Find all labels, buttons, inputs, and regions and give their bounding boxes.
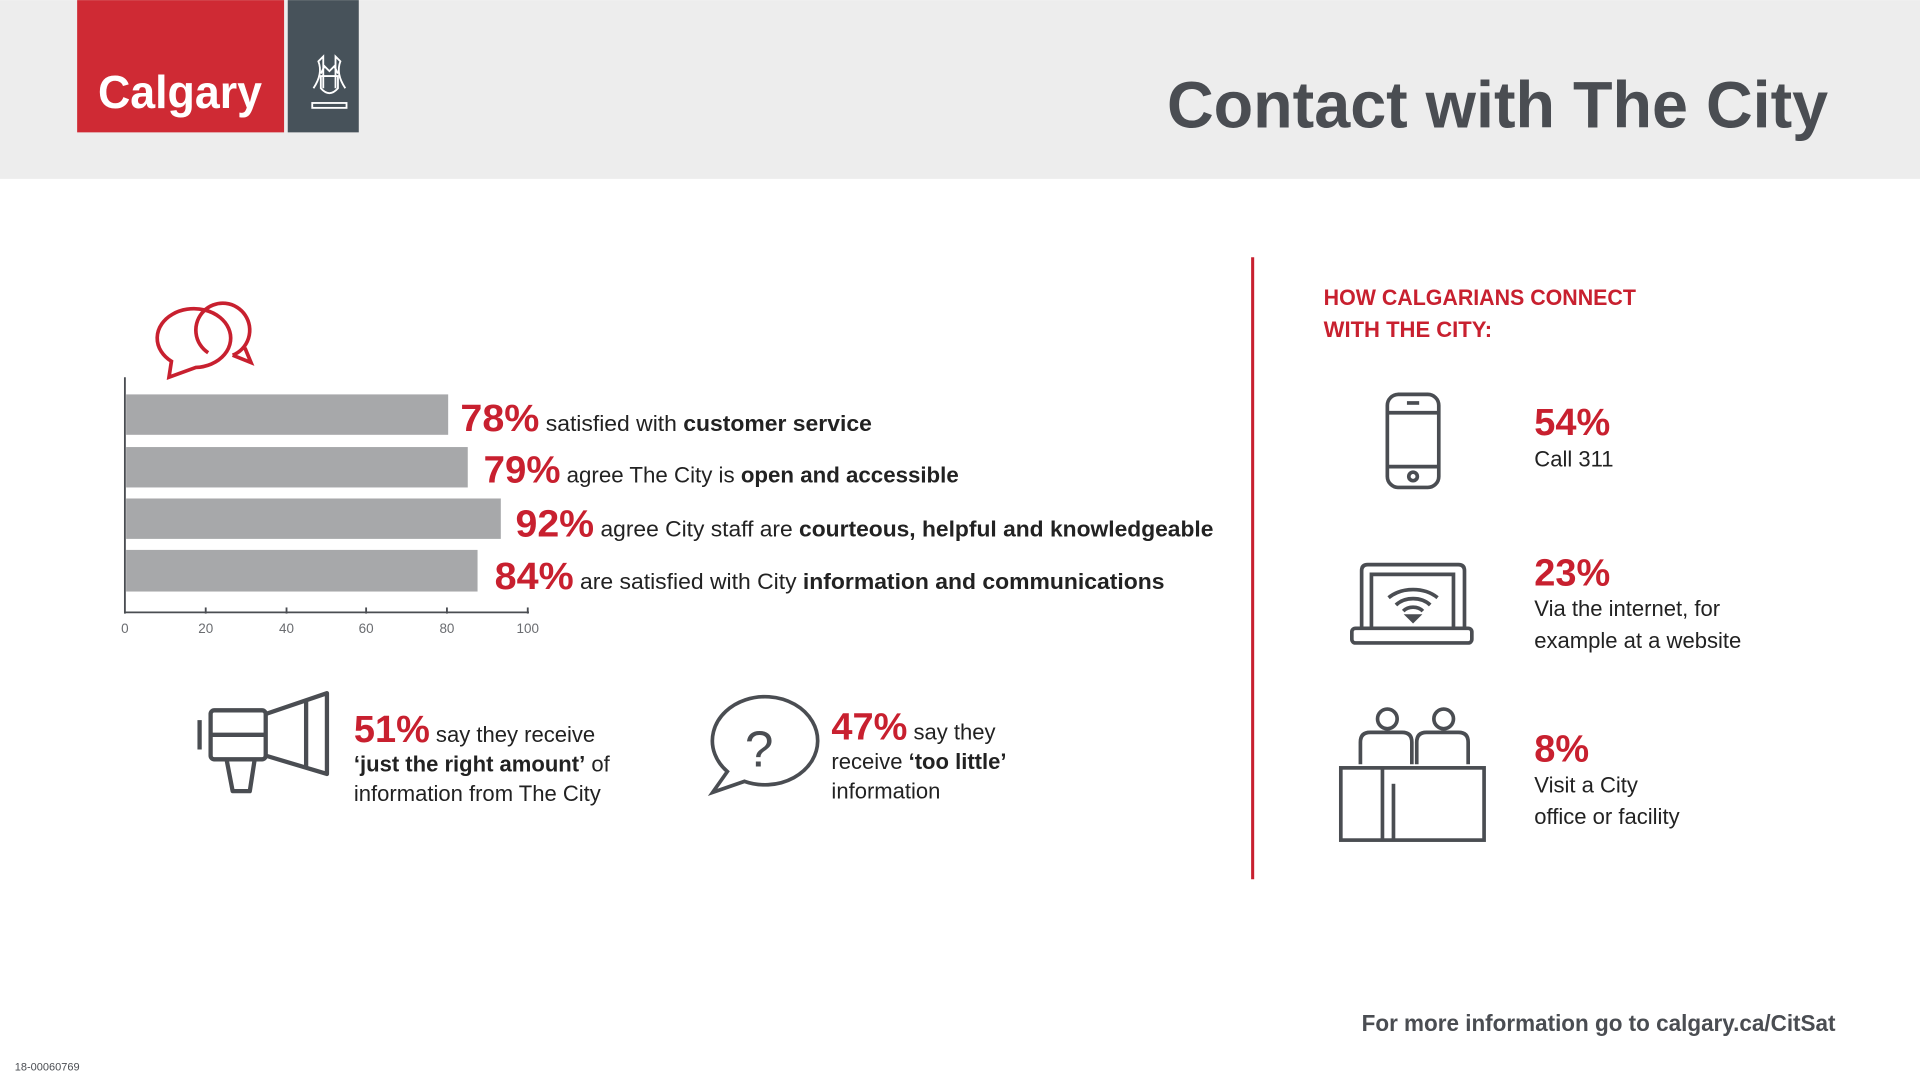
text: too little [831, 707, 1006, 803]
bar chart: 100 [517, 621, 539, 636]
heading: how calgarians connect: HOW CALGARIANS CONNECT [1324, 285, 1636, 310]
stat: visit office: 8% [1534, 729, 1589, 771]
header band [0, 0, 1920, 179]
logo [77, 0, 359, 132]
icon: phone [1387, 394, 1439, 487]
divider [1251, 257, 1254, 879]
stat: visit office: Visit a City [1534, 772, 1638, 797]
logo: Calgary [98, 66, 262, 118]
icon: megaphone [200, 693, 327, 791]
stat: call 311 [1534, 402, 1613, 472]
bar chart: 80 [439, 621, 454, 636]
footer link: For more information go to calgary.ca/CitSat [1362, 1010, 1836, 1036]
text: just the right amount: ‘just the right amount’ of [354, 752, 611, 777]
stat: internet [1534, 552, 1741, 653]
text: too little: receive ‘too little’ [831, 749, 1006, 774]
icon: question bubble [712, 697, 818, 792]
bar labels: 78% satisfied with customer service [460, 398, 872, 440]
bar chart: 40 [279, 621, 294, 636]
heading: how calgarians connect [1324, 285, 1636, 342]
stat: call 311: 54% [1534, 402, 1610, 444]
code: 18-00060769 [15, 1061, 80, 1073]
bar chart: 20 [198, 621, 213, 636]
text: too little: 47% say they [831, 707, 996, 749]
stat: visit office [1534, 729, 1680, 829]
heading: how calgarians connect: WITH THE CITY: [1324, 317, 1492, 342]
stat: call 311: Call 311 [1534, 447, 1613, 472]
bar labels: 84% are satisfied with City information and communications [495, 556, 1164, 598]
bar chart: 60 [359, 621, 374, 636]
stat: internet: Via the internet, for [1534, 596, 1720, 621]
text: just the right amount: information from The City [354, 781, 601, 806]
bar chart: 0 [121, 621, 129, 636]
title: Contact with The City [1167, 68, 1828, 142]
icon: laptop [1352, 565, 1472, 643]
icon: office counter [1341, 709, 1484, 840]
stat: internet: example at a website [1534, 628, 1741, 653]
bar chart [121, 377, 539, 636]
text: just the right amount [354, 709, 611, 806]
stat: internet: 23% [1534, 552, 1610, 594]
icon: speech bubbles [157, 303, 251, 377]
stat: visit office: office or facility [1534, 804, 1680, 829]
text: too little: information [831, 778, 940, 803]
bar labels: 79% agree The City is open and accessible [484, 450, 959, 492]
text: just the right amount: 51% say they receive [354, 709, 595, 751]
icon: question bubble: ? [745, 720, 773, 778]
bar labels: 92% agree City staff are courteous, helpful and knowledgeable [516, 503, 1213, 545]
bar labels [460, 398, 1213, 598]
